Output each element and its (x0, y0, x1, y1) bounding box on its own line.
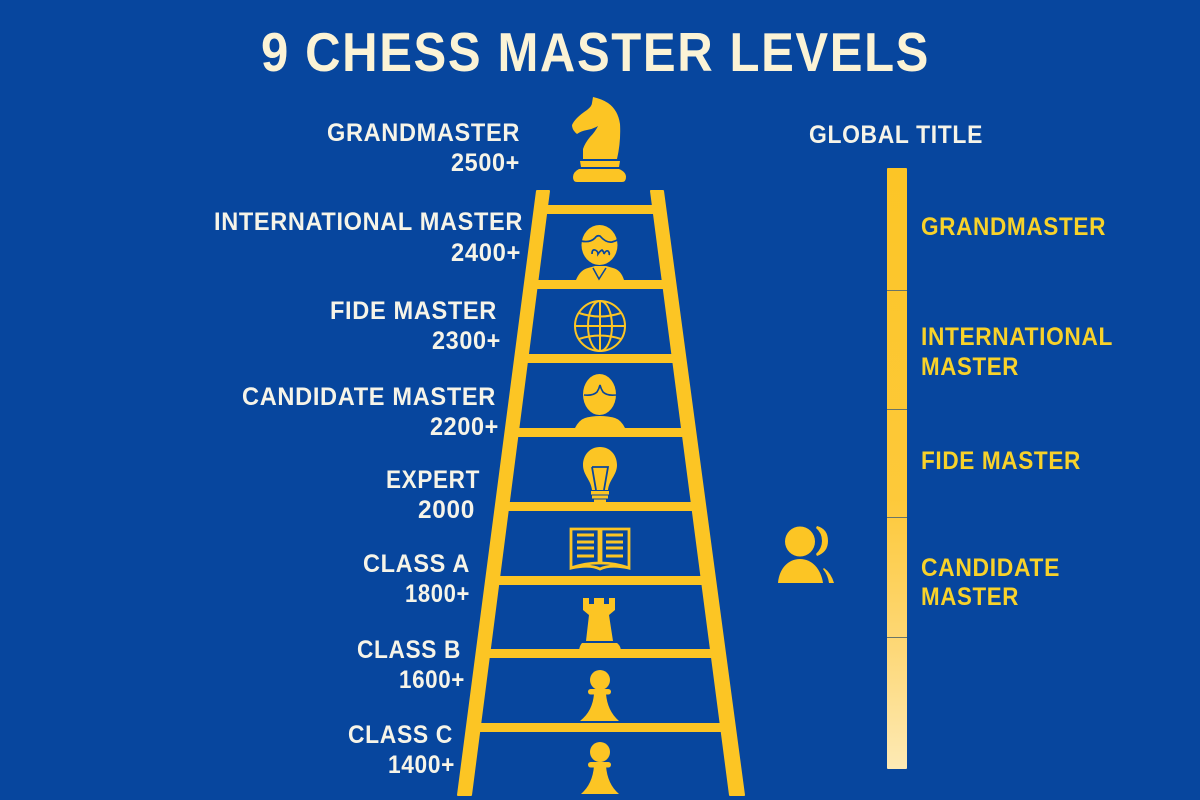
label: Class C: CLASS C (348, 721, 453, 749)
label: Class C: 1400+ (388, 751, 455, 779)
icon: globe (575, 301, 625, 351)
title: International Master: INTERNATIONAL (921, 323, 1113, 351)
icon: rook (579, 598, 621, 650)
label: International Master: INTERNATIONAL MASTER (214, 208, 523, 236)
label: Candidate Master: 2200+ (430, 413, 499, 441)
label: Class C (348, 721, 455, 779)
icon: international master person (576, 225, 624, 280)
label: Grandmaster: GRANDMASTER (327, 119, 520, 147)
icon: candidate person (575, 374, 625, 428)
label: Class A (363, 550, 470, 608)
title: International Master (921, 323, 1113, 381)
label: International Master (214, 208, 523, 267)
ladder (458, 191, 744, 795)
icon: speaking person (778, 526, 834, 583)
label: Class A: 1800+ (405, 580, 470, 608)
icon: pawn bottom (581, 742, 619, 794)
title progress bar (887, 168, 907, 769)
global title list (921, 213, 1113, 611)
title: Candidate Master: MASTER (921, 583, 1019, 611)
label: Candidate Master: CANDIDATE MASTER (242, 383, 496, 411)
title: FIDE Master: FIDE MASTER (921, 447, 1081, 475)
label: Grandmaster: 2500+ (451, 149, 520, 177)
title: Grandmaster: GRANDMASTER (921, 213, 1106, 241)
title: 9 CHESS MASTER LEVELS (261, 21, 930, 83)
label: FIDE Master: 2300+ (432, 327, 501, 355)
label: Class B: 1600+ (399, 666, 465, 694)
label: Class B (357, 636, 465, 694)
icon: open book (571, 529, 629, 569)
icon: knight (572, 97, 626, 182)
label: FIDE Master: FIDE MASTER (330, 297, 497, 325)
level labels (214, 119, 523, 779)
label: Candidate Master (242, 383, 499, 441)
title: Candidate Master (921, 554, 1060, 611)
label: Class A: CLASS A (363, 550, 470, 578)
icon: pawn (580, 670, 619, 721)
title: Candidate Master: CANDIDATE (921, 554, 1060, 582)
label: Expert: 2000 (418, 496, 475, 524)
icon: light bulb (583, 447, 617, 502)
title: International Master: MASTER (921, 353, 1019, 381)
label: Grandmaster (327, 119, 520, 177)
label: Class B: CLASS B (357, 636, 461, 664)
label: FIDE Master (330, 297, 501, 355)
heading: global title: GLOBAL TITLE (809, 121, 983, 149)
label: Expert (386, 466, 480, 524)
label: Expert: EXPERT (386, 466, 480, 494)
label: International Master: 2400+ (451, 239, 521, 267)
